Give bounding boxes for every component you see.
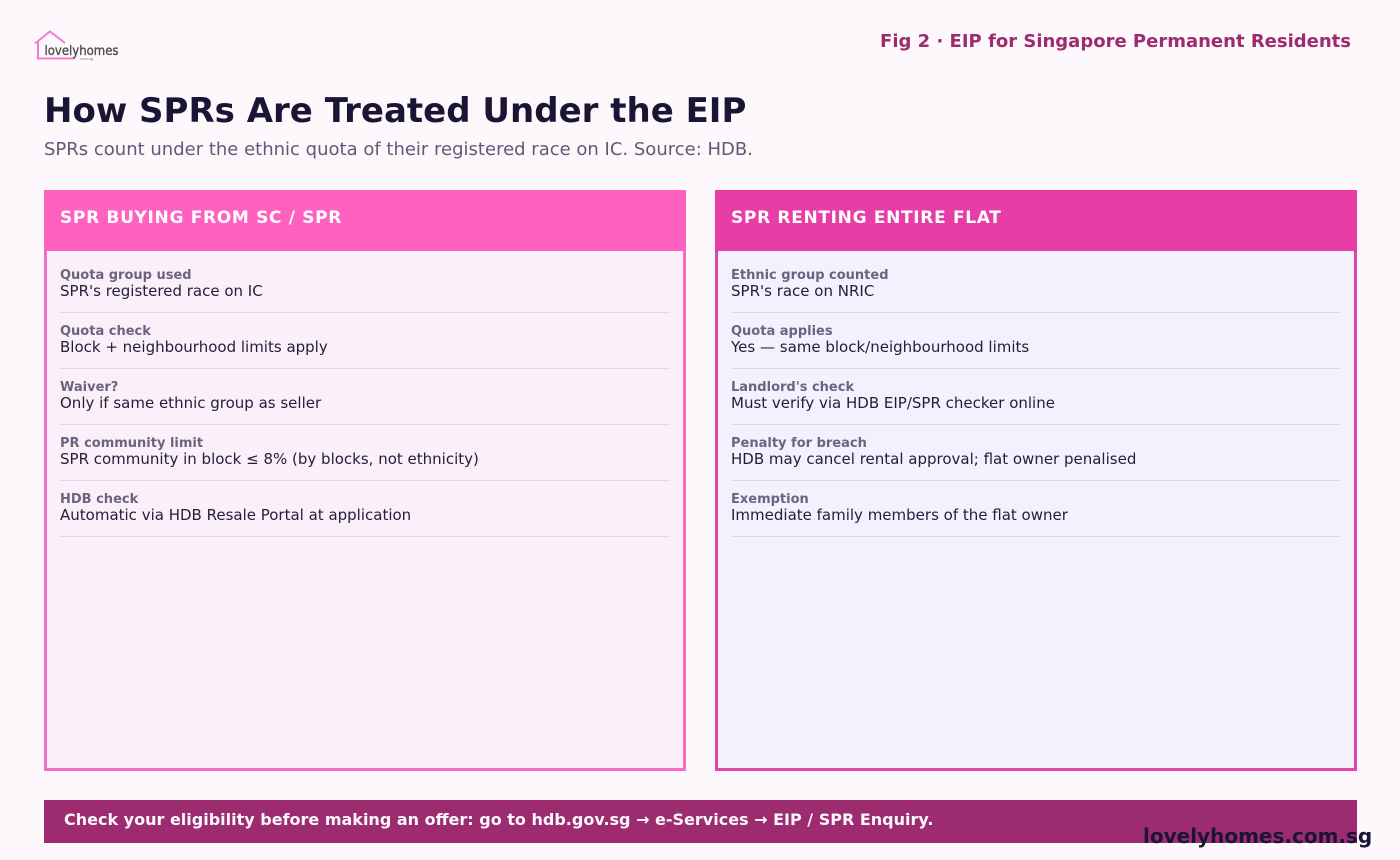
row: waiver: Only if same ethnic group as seller [60,394,321,412]
brand watermark: lovelyhomes.com.sg [1143,824,1372,848]
row: PR community limit: PR community limit [60,436,203,451]
figure label: Fig 2 · EIP for Singapore Permanent Residents [880,31,1351,52]
row: HDB check: HDB check [60,492,138,507]
subtitle: SPRs count under the ethnic quota of their registered race on IC. Source: HDB. [44,139,753,160]
row: quota group used [60,267,670,313]
row: landlord's check: Must verify via HDB EIP/SPR checker online [731,394,1055,412]
panel: SPR renting entire flat [715,190,1357,771]
row: exemption [731,491,1341,537]
panel heading: buying [44,190,686,251]
row: landlord's check: Landlord's check [731,380,854,395]
panel heading: buying: SPR BUYING FROM SC / SPR [60,208,342,228]
row: ethnic group counted [731,267,1341,313]
row: HDB check: Automatic via HDB Resale Portal at application [60,506,411,524]
row: penalty for breach: HDB may cancel rental approval; flat owner penalised [731,450,1136,468]
panel: SPR buying from SC / SPR [44,190,686,771]
title: How SPRs Are Treated Under the EIP [44,91,746,131]
row: PR community limit: SPR community in block ≤ 8% (by blocks, not ethnicity) [60,450,479,468]
logo: .com.sg [79,56,93,61]
row: quota check: Quota check [60,324,151,339]
row: exemption: Exemption [731,492,809,507]
row: quota check: Block + neighbourhood limits apply [60,338,328,356]
row: penalty for breach: Penalty for breach [731,436,867,451]
footer banner: Check your eligibility before making an offer: go to hdb.gov.sg → e-Services → EIP / SPR Enquiry. [64,810,933,829]
row: ethnic group counted: SPR's race on NRIC [731,282,874,300]
row: ethnic group counted: Ethnic group counted [731,268,889,283]
row: quota applies [731,323,1341,369]
row: waiver [60,379,670,425]
panel heading: renting: SPR RENTING ENTIRE FLAT [731,208,1002,228]
row: quota applies: Quota applies [731,324,833,339]
row: quota group used: Quota group used [60,268,192,283]
row: quota applies: Yes — same block/neighbourhood limits [731,338,1029,356]
row: exemption: Immediate family members of the flat owner [731,506,1068,524]
row: HDB check [60,491,670,537]
row: PR community limit [60,435,670,481]
row: landlord's check [731,379,1341,425]
logo [34,30,118,61]
row: quota group used: SPR's registered race on IC [60,282,263,300]
row: penalty for breach [731,435,1341,481]
panel heading: renting [715,190,1357,251]
row: quota check [60,323,670,369]
row: waiver: Waiver? [60,380,118,395]
footer banner [44,800,1357,843]
